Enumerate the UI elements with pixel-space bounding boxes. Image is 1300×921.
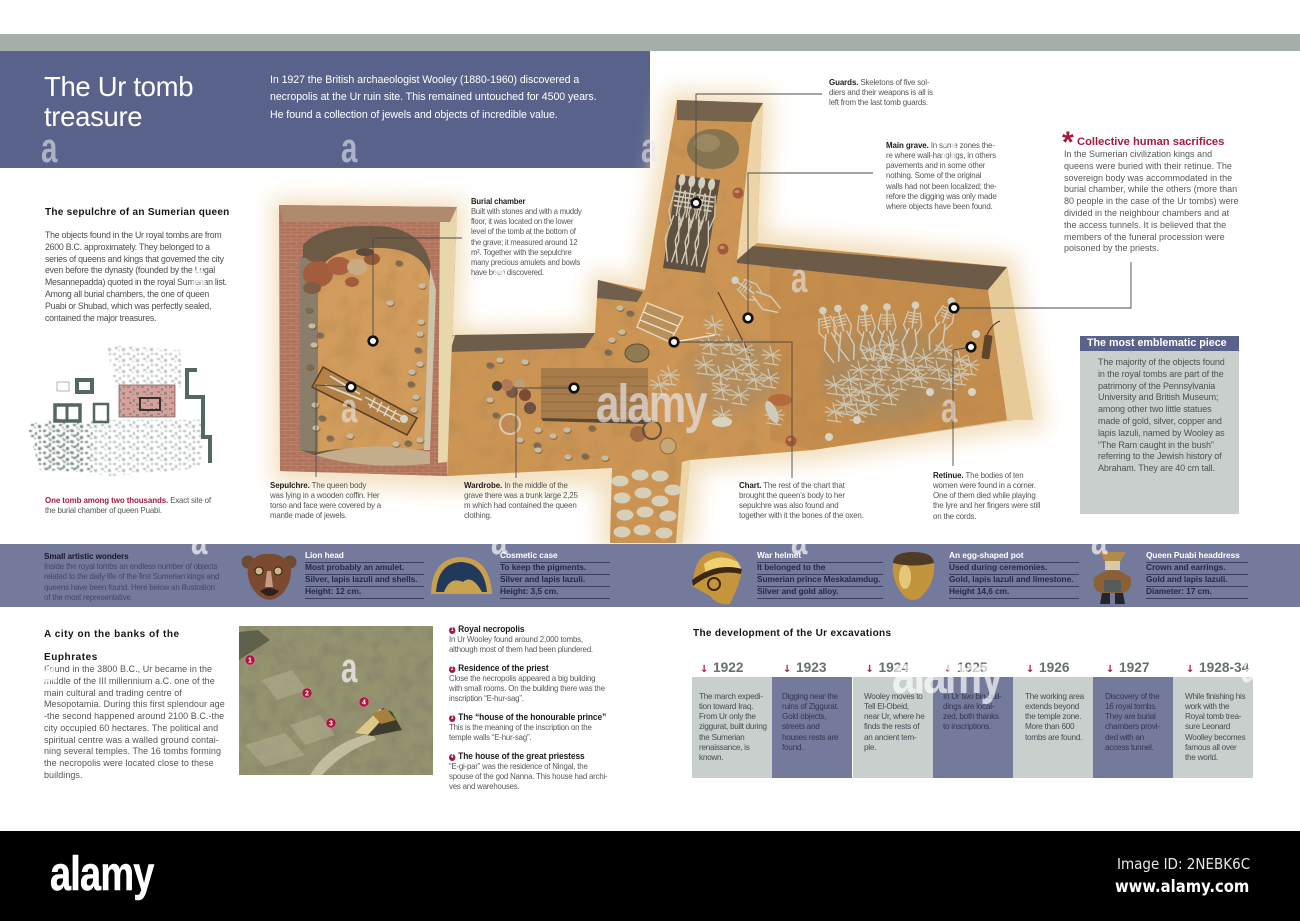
heading: excavations timeline: The development of the Ur excavations: [693, 628, 891, 639]
column 1926: The working area: [1025, 692, 1084, 701]
item: cosmetic case: Height: 3,5 cm.: [500, 586, 558, 596]
item: residence of the priest: 2: [451, 666, 453, 672]
panel text: patrimony of the Pennsylvania: [1098, 381, 1215, 391]
text: sepulchre intro: Mesannepadda) quoted in the royal Sumerian list.: [45, 277, 227, 287]
item: house of the honourable prince: The “house of the honourable prince”: [458, 712, 606, 722]
year 1927: ↓: [1106, 664, 1114, 675]
text: sepulchre intro: 2600 B.C. approximately. They belonged to a: [45, 242, 210, 252]
column 1928-34: Woolley becomes: [1185, 733, 1245, 742]
text: a: [941, 124, 957, 171]
body text: In the Sumerian civilization kings and: [1064, 149, 1212, 159]
callout: chart: brought the queen’s body to her: [739, 490, 845, 500]
walls and trench tops: [442, 100, 1033, 543]
year 1926: ↓: [1026, 664, 1034, 675]
heading: a city on the banks: Euphrates: [44, 652, 98, 663]
callout: wardrobe: clothing.: [464, 510, 492, 520]
column 1927: They are burial: [1105, 712, 1156, 721]
title: treasure: [44, 100, 142, 132]
callout: sepulchre: torso and face were covered by a: [270, 500, 381, 510]
callout: chart: sepulchre was also found and: [739, 500, 838, 510]
site plan map: [28, 345, 212, 476]
numbered list: sites: [449, 624, 608, 791]
column 1926: More than 600: [1025, 722, 1074, 731]
heading: a city on the banks: [44, 629, 180, 663]
mound and guards pit: [661, 129, 739, 273]
column 1924: near Ur, where he: [864, 712, 924, 721]
text: a: [41, 644, 57, 691]
alamy logo: alamy: [50, 848, 154, 901]
wooden cart: [637, 303, 715, 342]
column 1924: Tell El-Obeid,: [864, 702, 909, 711]
caption: one tomb among two thousands: One tomb among two thousands. Exact site of: [45, 495, 211, 505]
intro text: [270, 74, 596, 121]
grave goods: [486, 188, 796, 462]
item rows: [500, 562, 610, 575]
panel text: made of gold, silver, copper and: [1098, 416, 1222, 426]
top grey band: [0, 34, 1300, 51]
item: residence of the priest: [449, 663, 605, 703]
column 1927: [1093, 677, 1173, 778]
column 1924: an ancient tem-: [864, 733, 916, 742]
title: The Ur tomb: [44, 71, 193, 102]
callout: burial chamber: floor, it was located on the lower: [471, 216, 573, 226]
band intro: of the most representative.: [44, 592, 133, 602]
text: sepulchre intro: Among all burial chambers, the one of queen: [45, 289, 209, 299]
column 1928-34: work with the: [1185, 702, 1229, 711]
column 1928-34: While finishing his: [1185, 692, 1245, 701]
item title: Cosmetic case: [500, 550, 558, 560]
column 1926: the temple zone.: [1025, 712, 1081, 721]
item rows: Crown and earrings.: [1146, 562, 1225, 572]
callout: main grave: re where wall-hangings, in others: [886, 150, 996, 160]
column 1925: to inscriptions.: [943, 722, 991, 731]
text: a: [191, 516, 207, 563]
column 1925: dings are local-: [943, 702, 994, 711]
panel text: lapis lazuli, named by Wooley as: [1098, 428, 1225, 438]
callout: sepulchre: Sepulchre. The queen body: [270, 480, 366, 490]
panel text: in the royal tombs are part of the: [1098, 369, 1224, 379]
item: house of the honourable prince: temple walls “E-hur-sag”.: [449, 732, 531, 742]
item rows: [1146, 562, 1248, 575]
callout: sepulchre: was lying in a wooden coffin. Her: [270, 490, 379, 500]
item title: Queen Puabi headdress: [1146, 550, 1240, 560]
panel text: The majority of the objects found: [1098, 357, 1225, 367]
text: sepulchre intro: Puabi or Shubad, which was perfectly sealed,: [45, 301, 211, 311]
item: residence of the priest: Residence of the priest: [458, 663, 549, 673]
item title: An egg-shaped pot: [949, 550, 1023, 560]
callout: chart: Chart. The rest of the chart that: [739, 480, 845, 490]
sand floor: [447, 100, 1033, 543]
item: royal necropolis: although most of them had been plundered.: [449, 644, 593, 654]
heading: a city on the banks: A city on the banks of the: [44, 629, 180, 640]
item: lion head: Height: 12 cm.: [305, 586, 361, 596]
column 1922: The march expedi-: [699, 692, 763, 701]
intro text: necropolis at the Ur ruin site. This remained untouched for 4500 years.: [270, 91, 596, 103]
callout: chart: [739, 480, 864, 520]
item: house of the great priestess: The house of the great priestess: [458, 751, 585, 761]
text: a: [491, 516, 507, 563]
item title: [305, 550, 424, 563]
text: city history: city occupied 60 hectares. The political and: [44, 723, 218, 733]
aerial photo of Ur: 4: [362, 700, 366, 706]
year 1927: [1106, 660, 1149, 678]
item title: [500, 550, 610, 563]
numbered markers: [245, 655, 369, 728]
item: queen Puabi headdress: Diameter: 17 cm.: [1146, 586, 1212, 596]
column 1922: known.: [699, 753, 723, 762]
text: a: [1241, 644, 1257, 691]
callout: sepulchre: mantle made of jewels.: [270, 510, 347, 520]
body text: the access tunnels. It is believed that the: [1064, 220, 1226, 230]
item: queen Puabi headdress: [1146, 550, 1248, 599]
panel text: Abraham. They are 40 cm tall.: [1098, 463, 1215, 473]
panel: most emblematic piece: [1080, 336, 1239, 514]
panel text: University and British Museum;: [1098, 392, 1218, 402]
text: a: [191, 254, 207, 301]
callout: guards: [829, 77, 933, 107]
column 1924: finds the rests of: [864, 722, 919, 731]
column 1922: From Ur only the: [699, 712, 756, 721]
red asterisk: *: [1062, 126, 1074, 159]
rubble areas: [27, 345, 205, 476]
column 1922: tion toward Iraq.: [699, 702, 753, 711]
item: house of the great priestess: “E-gi-par” was the residence of Ningal, the: [449, 761, 588, 771]
column 1922: ziggurat, built during: [699, 722, 767, 731]
callout: guards: diers and their weapons is all is: [829, 87, 933, 97]
text: a: [341, 124, 357, 171]
item title: Lion head: [305, 550, 344, 560]
callout: retinue: the lyre and her fingers were still: [933, 500, 1040, 510]
text: a: [341, 644, 357, 691]
body text: sovereign body was accommodated in the: [1064, 173, 1232, 183]
column 1923: Digging near the: [782, 692, 838, 701]
column 1927: 16 royal tombs.: [1105, 702, 1157, 711]
cobblestone passage: [612, 470, 682, 538]
callout: retinue: Retinue. The bodies of ten: [933, 470, 1023, 480]
item: egg-shaped pot: Height 14,6 cm.: [949, 586, 1009, 596]
column 1924: Wooley moves to: [864, 692, 923, 701]
item rows: Used during ceremonies.: [949, 562, 1047, 572]
item rows: [305, 562, 424, 575]
timeline: [692, 660, 1253, 778]
callout: retinue: One of them died while playing: [933, 490, 1036, 500]
item: residence of the priest: inscription “E-hur-sag”.: [449, 693, 524, 703]
aerial photo of Ur: [239, 626, 433, 775]
text: sepulchre intro: The objects found in the Ur royal tombs are from: [45, 230, 221, 240]
column 1928-34: [1173, 677, 1253, 778]
caption: one tomb among two thousands: [45, 495, 212, 515]
text: a: [1091, 516, 1107, 563]
column 1925: [933, 677, 1013, 778]
callout: main grave: refore the digging was only made: [886, 191, 997, 201]
title: [44, 71, 193, 132]
text: sepulchre intro: [45, 230, 227, 323]
text: city history: -the second happened around 2100 B.C.-the: [44, 711, 224, 721]
column 1926: extends beyond: [1025, 702, 1079, 711]
year 1923: ↓: [783, 664, 791, 675]
skeletons of guards, oxen and retinue: [650, 271, 1000, 441]
year 1927: 1927: [1119, 660, 1149, 675]
column 1923: streets and: [782, 722, 820, 731]
item: war helmet: Sumerian prince Meskalamdug.: [757, 574, 880, 584]
callout: burial chamber: m². Together with the sepulchre: [471, 247, 572, 257]
item rows: [949, 562, 1079, 575]
item: house of the great priestess: ves and warehouses.: [449, 781, 519, 791]
callout: burial chamber: Built with stones and with a muddy: [471, 206, 582, 216]
year 1923: 1923: [796, 660, 826, 675]
item: cosmetic case: Silver and lapis lazuli.: [500, 574, 585, 584]
year 1924: ↓: [866, 664, 874, 675]
callout: wardrobe: [464, 480, 578, 520]
callout: main grave: walls had not been localized; the-: [886, 181, 997, 191]
item: house of the great priestess: 4: [451, 754, 453, 760]
year 1924: 1924: [878, 660, 909, 675]
item: lion head: [305, 550, 424, 599]
column 1927: access tunnel.: [1105, 743, 1154, 752]
icon: lion head: [242, 554, 296, 600]
callout: guards: Guards. Skeletons of five sol-: [829, 77, 929, 87]
column 1928-34: famous all over: [1185, 743, 1236, 752]
band intro: queens have been found. Here below an illustration: [44, 582, 215, 592]
text: a: [491, 254, 507, 301]
icon: war helmet: [692, 551, 742, 604]
item rows: To keep the pigments.: [500, 562, 586, 572]
callout: chart: together with it the bones of the oxen.: [739, 510, 864, 520]
callout: wardrobe: m which had contained the queen: [464, 500, 577, 510]
item: residence of the priest: Close the necropolis appeared a big building: [449, 673, 595, 683]
item rows: It belonged to the: [757, 562, 825, 572]
year 1926: 1926: [1039, 660, 1069, 675]
year 1922: 1922: [713, 660, 743, 675]
callout: burial chamber: [471, 196, 582, 277]
year 1925: ↓: [944, 664, 952, 675]
icon: queen Puabi headdress: [1094, 552, 1132, 604]
icon: egg-shaped pot: [892, 552, 934, 600]
panel heading: The most emblematic piece: [1087, 337, 1227, 349]
body text: burial chamber, while the others (more than: [1064, 184, 1237, 194]
body text: queens were buried with their retinue. The: [1064, 161, 1232, 171]
text: a: [641, 124, 657, 171]
column 1928-34: Royal tomb trea-: [1185, 712, 1241, 721]
column 1923: houses rests are: [782, 733, 838, 742]
watermark letters: a: [41, 124, 57, 171]
column 1927: ded with an: [1105, 733, 1144, 742]
item: egg-shaped pot: Gold, lapis lazuli and limestone.: [949, 574, 1073, 584]
image id: Image ID: 2NEBK6C: [1117, 855, 1250, 873]
panel: collective human sacrifices: [1062, 126, 1239, 253]
intro text: In 1927 the British archaeologist Wooley (1880-1960) discovered a: [270, 74, 579, 86]
year 1925: 1925: [957, 660, 987, 675]
column 1924: [853, 677, 933, 778]
item: house of the honourable prince: 3: [451, 715, 453, 721]
heading: sepulchre: The sepulchre of an Sumerian queen: [45, 207, 230, 218]
aerial photo of Ur: 3: [329, 720, 333, 728]
band intro: Small artistic wonders: [44, 551, 129, 561]
header panel: [0, 51, 650, 168]
item: lion head: Silver, lapis lazuli and shells.: [305, 574, 417, 584]
column 1923: found.: [782, 743, 803, 752]
callout: guards: left from the last tomb guards.: [829, 97, 928, 107]
buildings: [55, 370, 210, 463]
body text: members of the funeral procession were: [1064, 232, 1225, 242]
item title: [757, 550, 883, 563]
panel text: “The Ram caught in the bush”: [1098, 440, 1214, 450]
aerial photo of Ur: 1: [248, 658, 252, 664]
text: city history: spiritual centre was a walled ground contai-: [44, 734, 219, 744]
body text: [1064, 149, 1239, 253]
column 1924: ple.: [864, 743, 876, 752]
leader lines: [316, 94, 1131, 478]
band intro: related to the daily life of the first Sumerian kings and: [44, 571, 219, 581]
band intro: Inside the royal tombs an endless number of objects: [44, 561, 217, 571]
column 1923: [772, 677, 852, 778]
text: a: [941, 384, 957, 431]
ziggurat: [355, 708, 402, 736]
text: city history: the necropolis were located close to these: [44, 758, 214, 768]
caption: one tomb among two thousands: the burial chamber of queen Puabi.: [45, 505, 162, 515]
column 1928-34: sure Leonard: [1185, 722, 1230, 731]
watermark: alamy on illustration: alamy: [596, 374, 706, 434]
item: egg-shaped pot: [949, 550, 1079, 599]
text: city history: main cultural and trading centre of: [44, 688, 182, 698]
item: house of the honourable prince: [449, 712, 606, 742]
callout: burial chamber: the grave; it measured around 12: [471, 237, 577, 247]
text: sepulchre intro: even before the dynasty (founded by the Lugal: [45, 265, 215, 275]
callout: main grave: Main grave. In some zones the-: [886, 140, 995, 150]
item: house of the great priestess: [449, 751, 608, 791]
text: city history: ning several temples. The 16 tombs forming: [44, 746, 221, 756]
item title: War helmet: [757, 550, 801, 560]
band: small artistic wonders: [0, 544, 1300, 607]
callout: main grave: nothing. Some of the original: [886, 170, 981, 180]
item title: [949, 550, 1079, 563]
item: royal necropolis: In Ur Wooley found around 2,000 tombs,: [449, 634, 583, 644]
text: sepulchre intro: contained the major treasures.: [45, 313, 156, 323]
callout: wardrobe: grave there was a trunk large 2,25: [464, 490, 578, 500]
callout: main grave: [886, 140, 997, 211]
body text: divided in the neighbour chambers and at: [1064, 208, 1229, 218]
panel text: [1098, 357, 1225, 473]
burial chamber: [279, 205, 457, 476]
year 1928-34: ↓: [1186, 664, 1194, 675]
year 1928-34: 1928-34: [1199, 660, 1249, 675]
callout: sepulchre: [270, 480, 382, 520]
watermark: alamy on timeline: alamy: [892, 645, 1002, 705]
text: city history: Found in the 3800 B.C., Ur became in the: [44, 664, 212, 674]
callout: retinue: [933, 470, 1040, 521]
intro text: He found a collection of jewels and objects of incredible value.: [270, 109, 558, 121]
callout: main grave: where objects have been found.: [886, 201, 993, 211]
text: a: [791, 254, 807, 301]
column 1923: Gold objects,: [782, 712, 826, 721]
footer bar: [0, 831, 1300, 921]
item: residence of the priest: with small rooms. On the building there was the: [449, 683, 605, 693]
column 1927: chambers provi-: [1105, 722, 1160, 731]
pots in chamber: [303, 261, 333, 287]
callout: burial chamber: level of the tomb at the bottom of: [471, 226, 576, 236]
item: war helmet: Silver and gold alloy.: [757, 586, 838, 596]
item: royal necropolis: 1: [451, 627, 453, 633]
text: city history: buildings.: [44, 770, 83, 780]
column 1927: Discovery of the: [1105, 692, 1159, 701]
text: a: [791, 516, 807, 563]
item rows: Most probably an amulet.: [305, 562, 404, 572]
body text: 80 people in the case of the Ur tombs) were: [1064, 196, 1239, 206]
callout markers: [347, 199, 975, 392]
column 1923: ruins of Ziggurat.: [782, 702, 839, 711]
panel text: among other two little statues: [1098, 404, 1211, 414]
band intro: [44, 551, 219, 602]
item: war helmet: [757, 550, 883, 599]
text: a: [341, 384, 357, 431]
text: city history: [44, 664, 225, 780]
text: city history: Mesopotamia. During this first splendour age: [44, 699, 225, 709]
callout: retinue: women were found in a corner.: [933, 480, 1036, 490]
column 1925: In Ur two big buil-: [943, 692, 1002, 701]
column 1926: tombs are found.: [1025, 733, 1082, 742]
aerial photo of Ur: 2: [305, 690, 309, 698]
item: royal necropolis: Royal necropolis: [458, 624, 524, 634]
callout: burial chamber: Burial chamber: [471, 196, 525, 206]
column 1925: zed, both thanks: [943, 712, 999, 721]
wardrobe trunk: [541, 368, 648, 424]
year 1922: ↓: [700, 664, 708, 675]
item: royal necropolis: [449, 624, 593, 654]
panel text: referring to the Jewish history of: [1098, 451, 1221, 461]
halo around excavation: [272, 90, 1046, 550]
icon: cosmetic case: [431, 557, 492, 594]
body text: poisoned by the priests.: [1064, 243, 1159, 253]
column 1922: the Sumerian: [699, 733, 744, 742]
item: queen Puabi headdress: Gold and lapis lazuli.: [1146, 574, 1228, 584]
website: www.alamy.com: [1115, 877, 1249, 897]
callout: wardrobe: Wardrobe. In the middle of the: [464, 480, 568, 490]
callout: retinue: on the cords.: [933, 511, 976, 521]
column 1922: renaissance, is: [699, 743, 750, 752]
item: cosmetic case: [500, 550, 610, 599]
callout: burial chamber: many precious amulets and bowls: [471, 257, 580, 267]
item rows: [757, 562, 883, 575]
year 1928-34: [1186, 660, 1249, 678]
callout: burial chamber: have been discovered.: [471, 267, 544, 277]
text: sepulchre intro: series of queens and kings that governed the city: [45, 254, 224, 264]
column 1922: [692, 677, 772, 778]
callout: main grave: pavements and in some other: [886, 160, 985, 170]
column 1926: [1013, 677, 1093, 778]
heading: Collective human sacrifices: [1077, 136, 1224, 148]
text: city history: middle of the III millennium a.C. one of the: [44, 676, 215, 686]
highlighted burial site: [119, 385, 175, 417]
column 1928-34: the world.: [1185, 753, 1218, 762]
item: house of the great priestess: spouse of the god Nanna. This house had archi-: [449, 771, 607, 781]
item: house of the honourable prince: This is the meaning of the inscription on the: [449, 722, 592, 732]
